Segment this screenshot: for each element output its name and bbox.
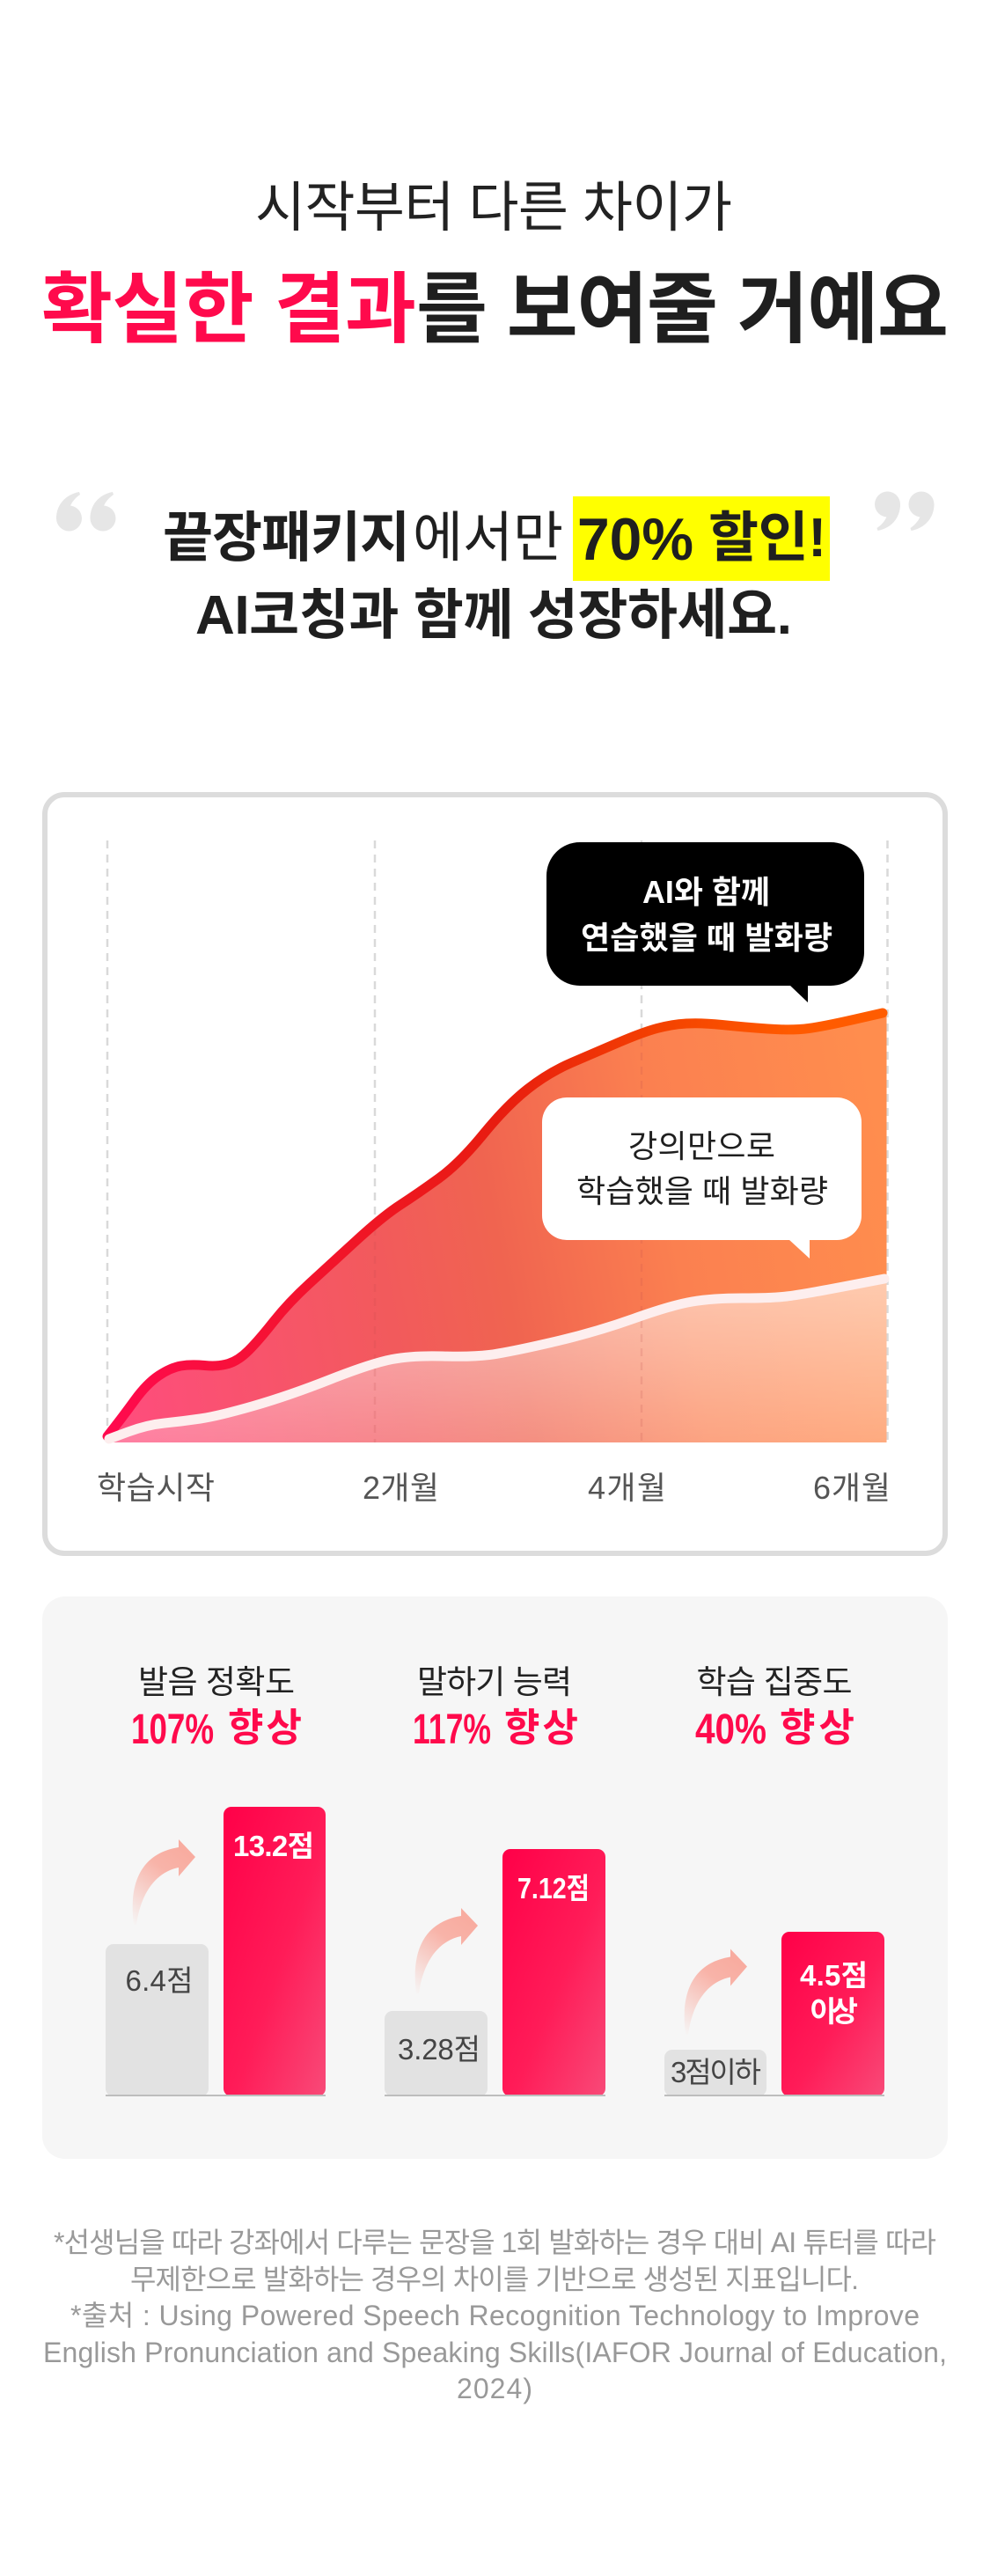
grid lines bbox=[107, 840, 887, 1442]
group: learning focus: 3점이하 bbox=[671, 2056, 761, 2088]
quote text: 할인! bbox=[708, 508, 826, 569]
group: pronunciation accuracy: 향상 bbox=[228, 1706, 302, 1750]
group: pronunciation accuracy: 발음 정확도 bbox=[138, 1664, 295, 1700]
area: lecture only bbox=[109, 1279, 887, 1442]
line: AI practice bbox=[107, 1013, 883, 1436]
callout: lecture only: 강의만으로 bbox=[628, 1128, 775, 1164]
callout: AI practice bbox=[546, 842, 864, 1002]
icon: right quote mark bbox=[875, 491, 935, 531]
callout: AI practice: AI와 함께 bbox=[642, 874, 770, 910]
axis labels bbox=[97, 1470, 891, 1506]
footnote: *선생님을 따라 강좌에서 다루는 문장을 1회 발화하는 경우 대비 AI 튜터를 따라 bbox=[54, 2227, 936, 2258]
grid lines over areas bbox=[375, 1038, 642, 1442]
axis labels: 2개월 bbox=[363, 1470, 439, 1506]
quote text: AI코칭과 함께 성장하세요. bbox=[195, 585, 792, 646]
group: speaking ability bbox=[385, 1664, 605, 2096]
group: pronunciation accuracy: 13.2점 bbox=[233, 1830, 314, 1862]
panel: improvement bars bbox=[42, 1596, 948, 2159]
footnote: 무제한으로 발화하는 경우의 차이를 기반으로 생성된 지표입니다. bbox=[130, 2264, 859, 2295]
quote text: 끝장패키지 bbox=[163, 508, 410, 569]
group: speaking ability: 7.12점 bbox=[517, 1872, 590, 1904]
area: AI practice bbox=[107, 1013, 887, 1442]
footnote: 2024) bbox=[457, 2373, 532, 2404]
group: learning focus: 향상 bbox=[780, 1706, 854, 1750]
footnote: English Pronunciation and Speaking Skills(IAFOR Journal of Education, bbox=[43, 2337, 947, 2368]
axis labels: 학습시작 bbox=[97, 1470, 215, 1506]
group: speaking ability: 말하기 능력 bbox=[417, 1664, 572, 1700]
icon: left quote mark bbox=[56, 492, 116, 532]
footnote: *출처 : Using Powered Speech Recognition Technology to Improve bbox=[70, 2300, 920, 2331]
subtitle: 시작부터 다른 차이가 bbox=[255, 178, 732, 239]
title: 확실한 결과 bbox=[41, 266, 416, 353]
group: learning focus: 4.5점 bbox=[800, 1959, 868, 1992]
group: pronunciation accuracy: 6.4점 bbox=[125, 1964, 194, 1997]
group: speaking ability: 3.28점 bbox=[398, 2033, 480, 2066]
callout: AI practice: 연습했을 때 발화량 bbox=[581, 920, 832, 956]
quote text bbox=[163, 506, 826, 646]
quote text: 에서만 bbox=[413, 508, 563, 569]
card frame bbox=[45, 795, 945, 1553]
group: learning focus: 40% bbox=[695, 1706, 766, 1753]
title bbox=[41, 266, 949, 353]
group: pronunciation accuracy bbox=[106, 1664, 326, 2096]
group: speaking ability: 향상 bbox=[504, 1706, 578, 1750]
axis labels: 6개월 bbox=[813, 1470, 891, 1506]
panel: speaking volume chart bbox=[45, 795, 945, 1553]
group: learning focus: 학습 집중도 bbox=[697, 1664, 852, 1700]
title: 를 보여줄 거예요 bbox=[416, 266, 949, 353]
group: speaking ability: 117% bbox=[413, 1706, 491, 1753]
group: learning focus: 이상 bbox=[810, 1995, 858, 2028]
callout: lecture only: 학습했을 때 발화량 bbox=[576, 1173, 828, 1209]
panel background bbox=[42, 1596, 948, 2159]
callout: lecture only bbox=[542, 1097, 862, 1259]
group: pronunciation accuracy: 107% bbox=[131, 1706, 214, 1753]
highlight box bbox=[573, 496, 830, 581]
footnote bbox=[43, 2227, 947, 2404]
line: lecture only bbox=[109, 1279, 884, 1439]
axis labels: 4개월 bbox=[588, 1470, 666, 1506]
quote text: 70% bbox=[577, 506, 693, 573]
group: learning focus bbox=[664, 1664, 884, 2096]
